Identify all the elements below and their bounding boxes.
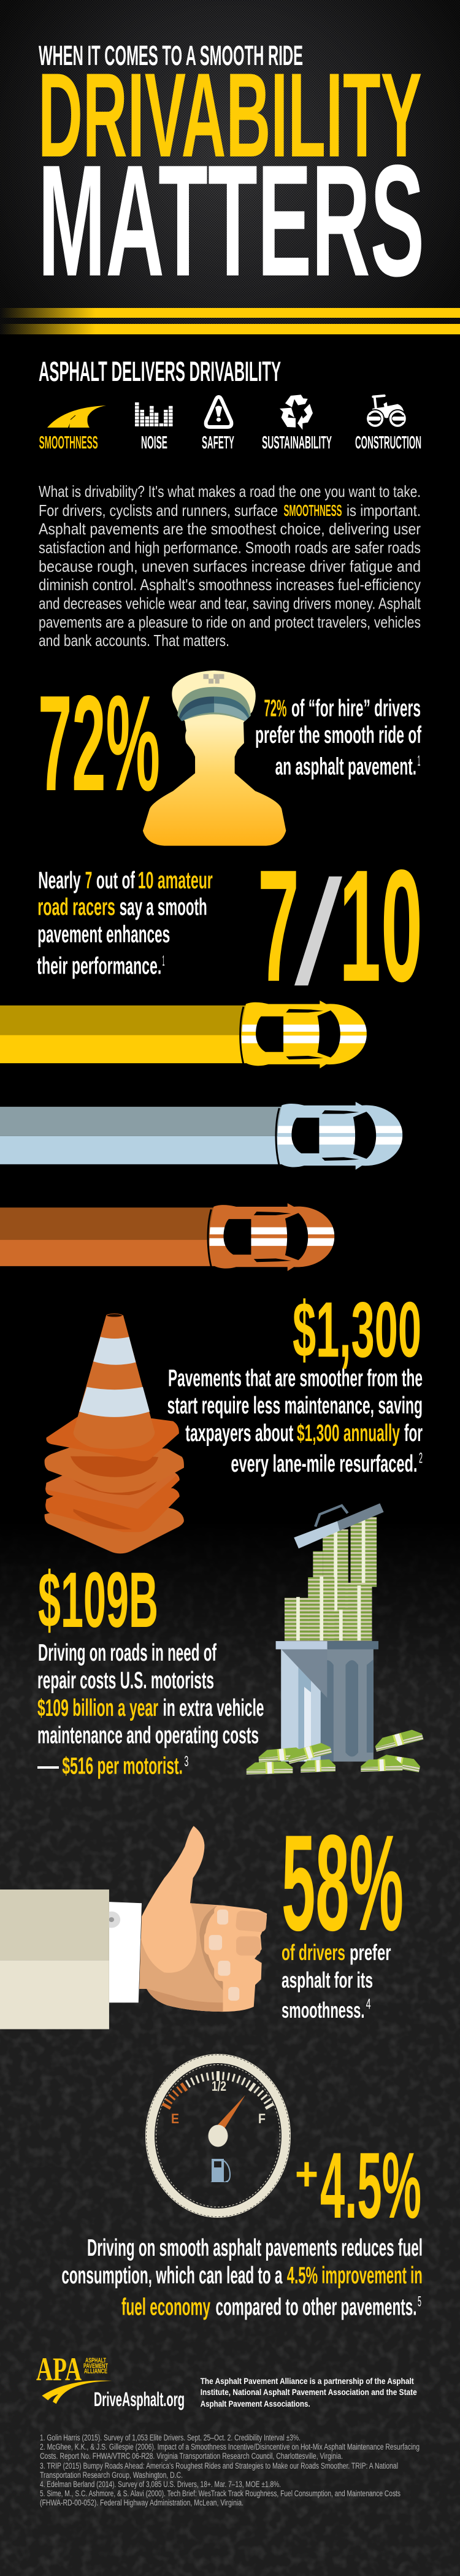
text: amateur road racers: out of [96, 867, 135, 894]
icon: fuel pump [210, 2159, 230, 2182]
text: amateur road racers: 10 amateur [138, 867, 213, 894]
text: repair costs [37, 1640, 264, 1780]
footnotes [40, 2433, 420, 2507]
background: carbon header panel [0, 0, 460, 334]
illustration: fuel gauge [146, 2055, 289, 2217]
car: yellow [0, 1001, 370, 1069]
stat: 7/10: / [294, 850, 343, 1016]
text: less maintenance [167, 1366, 423, 1477]
alliance statement: Asphalt Pavement Associations. [201, 2399, 310, 2409]
text: drivers prefer asphalt: prefer [350, 1940, 391, 1965]
icon labels [39, 433, 421, 453]
text: drivers prefer asphalt: asphalt for its [282, 1967, 373, 1993]
stat: +4.5%: + [295, 2147, 318, 2201]
icon: safety triangle [206, 397, 231, 427]
text: fuel economy: fuel economy [121, 2294, 210, 2320]
gauge labels: 1/2 [212, 2078, 226, 2094]
icon labels: SUSTAINABILITY [262, 433, 332, 453]
stat: 7/10 [258, 837, 423, 1016]
illustration: trash can full of money [247, 1504, 424, 1774]
icon labels: NOISE [141, 433, 167, 453]
text: less maintenance: taxpayers about [185, 1420, 293, 1447]
text: amateur road racers: their performance. [37, 953, 161, 980]
gauge labels [171, 2078, 266, 2126]
footnotes: (FHWA-RD-00-052). Federal Highway Administration, McLean, Virginia. [40, 2498, 243, 2507]
logo: APA: PAVEMENT [83, 2363, 108, 2370]
text: repair costs: 3 [184, 1753, 188, 1770]
footnotes: 1. Golin Harris (2015). Survey of 1,053 Elite Drivers. Sept. 25–Oct. 2. Credibility Interval ±3%. [40, 2433, 301, 2442]
text: amateur road racers: say a smooth [120, 894, 207, 921]
infographic canvas: 72% [38, 667, 160, 820]
text: repair costs: — [37, 1753, 59, 1780]
stat: +4.5% [295, 2133, 421, 2238]
intro paragraph: SMOOTHNESS [283, 501, 342, 520]
text: repair costs: Driving on roads in need of [38, 1640, 217, 1666]
alliance statement: The Asphalt Pavement Alliance is a partnership of the Asphalt [201, 2376, 414, 2386]
road stripes [0, 308, 460, 334]
illustration: traffic cone stack [45, 1314, 184, 1553]
intro paragraph [39, 482, 421, 650]
text: less maintenance: for [404, 1420, 423, 1447]
intro paragraph: because rough, uneven surfaces increase driver fatigue and [39, 557, 421, 575]
text: repair costs: $109 billion a year [37, 1695, 158, 1721]
alliance statement: Institute, National Asphalt Pavement Association and the State [201, 2387, 417, 2397]
text: amateur road racers: 7 [85, 867, 92, 894]
logo: APA [36, 2351, 112, 2404]
footnotes: 4. Edelman Berland (2014). Survey of 3,085 U.S. Drivers, 18+. Mar. 7–13, MOE ±1.8%. [40, 2480, 281, 2489]
footnotes: Costs. Report No. FHWA/VTRC 06-R28. Virginia Transportation Research Council, Charlottesville, Virginia. [40, 2451, 343, 2461]
text: amateur road racers: road racers [37, 894, 115, 921]
text: drivers prefer asphalt: of drivers [282, 1940, 345, 1965]
gauge labels: E [171, 2111, 179, 2126]
text: amateur road racers [37, 867, 213, 980]
text: fuel economy: 5 [418, 2294, 421, 2310]
background: asphalt texture [0, 1521, 460, 2576]
text: amateur road racers: Nearly [38, 867, 81, 894]
stat: 7/10: 7 [258, 837, 299, 1015]
illustration: thumbs up hand [0, 1826, 267, 2029]
intro paragraph: is important. [347, 501, 421, 520]
text: for hire drivers [255, 696, 422, 780]
stat: $109B: $109B [38, 1556, 158, 1644]
text: drivers prefer asphalt: smoothness. [282, 1997, 364, 2023]
car: orange [0, 1203, 337, 1271]
gauge needle [214, 2095, 245, 2132]
text: fuel economy [61, 2235, 423, 2320]
race cars with trails [0, 1001, 405, 1271]
icon labels: SMOOTHNESS [39, 433, 98, 453]
text: repair costs: $516 per motorist. [62, 1753, 183, 1780]
text: repair costs: maintenance and operating costs [37, 1723, 259, 1749]
text: amateur road racers: pavement enhances [37, 921, 170, 948]
infographic canvas: 2 [419, 1450, 423, 1466]
footnotes: Transportation Research Group, Washington, D.C. [40, 2470, 183, 2480]
text: amateur road racers: 1 [162, 953, 164, 969]
text: fuel economy: consumption, which can lead to a [61, 2263, 283, 2289]
icon: recycling [280, 394, 313, 430]
url: DriveAsphalt.org [94, 2388, 185, 2410]
text: drivers prefer asphalt [282, 1940, 391, 2023]
logo: APA: ASPHALT [85, 2357, 106, 2364]
title [38, 40, 424, 309]
gauge hub [209, 2125, 228, 2147]
text: repair costs: in extra vehicle [163, 1695, 264, 1721]
gauge ticks [163, 2071, 274, 2109]
text: for hire drivers: 72% [264, 696, 287, 721]
text: for hire drivers: 1 [417, 753, 421, 769]
icon: construction roller [366, 396, 407, 428]
icon row [39, 394, 421, 453]
intro paragraph: Asphalt pavements are the smoothest choice, delivering user [39, 520, 421, 538]
icon: taxi driver silhouette [143, 671, 286, 846]
logo: APA: ALLIANCE [84, 2368, 107, 2375]
intro paragraph: and bank accounts. That matters. [39, 631, 229, 650]
text: drivers prefer asphalt: 4 [366, 1996, 371, 2013]
gauge labels: F [258, 2111, 266, 2126]
money bundles on the ground [247, 1728, 424, 1774]
car: light blue [0, 1102, 405, 1170]
alliance statement [201, 2376, 417, 2409]
intro paragraph: For drivers, cyclists and runners, surface [39, 501, 278, 520]
icon: smoothness road [47, 406, 106, 428]
icon labels: SAFETY [202, 433, 234, 453]
logo: APA: APA [36, 2351, 82, 2388]
text: repair costs: repair costs U.S. motorists [37, 1667, 214, 1694]
icon: noise equalizer [137, 402, 171, 426]
